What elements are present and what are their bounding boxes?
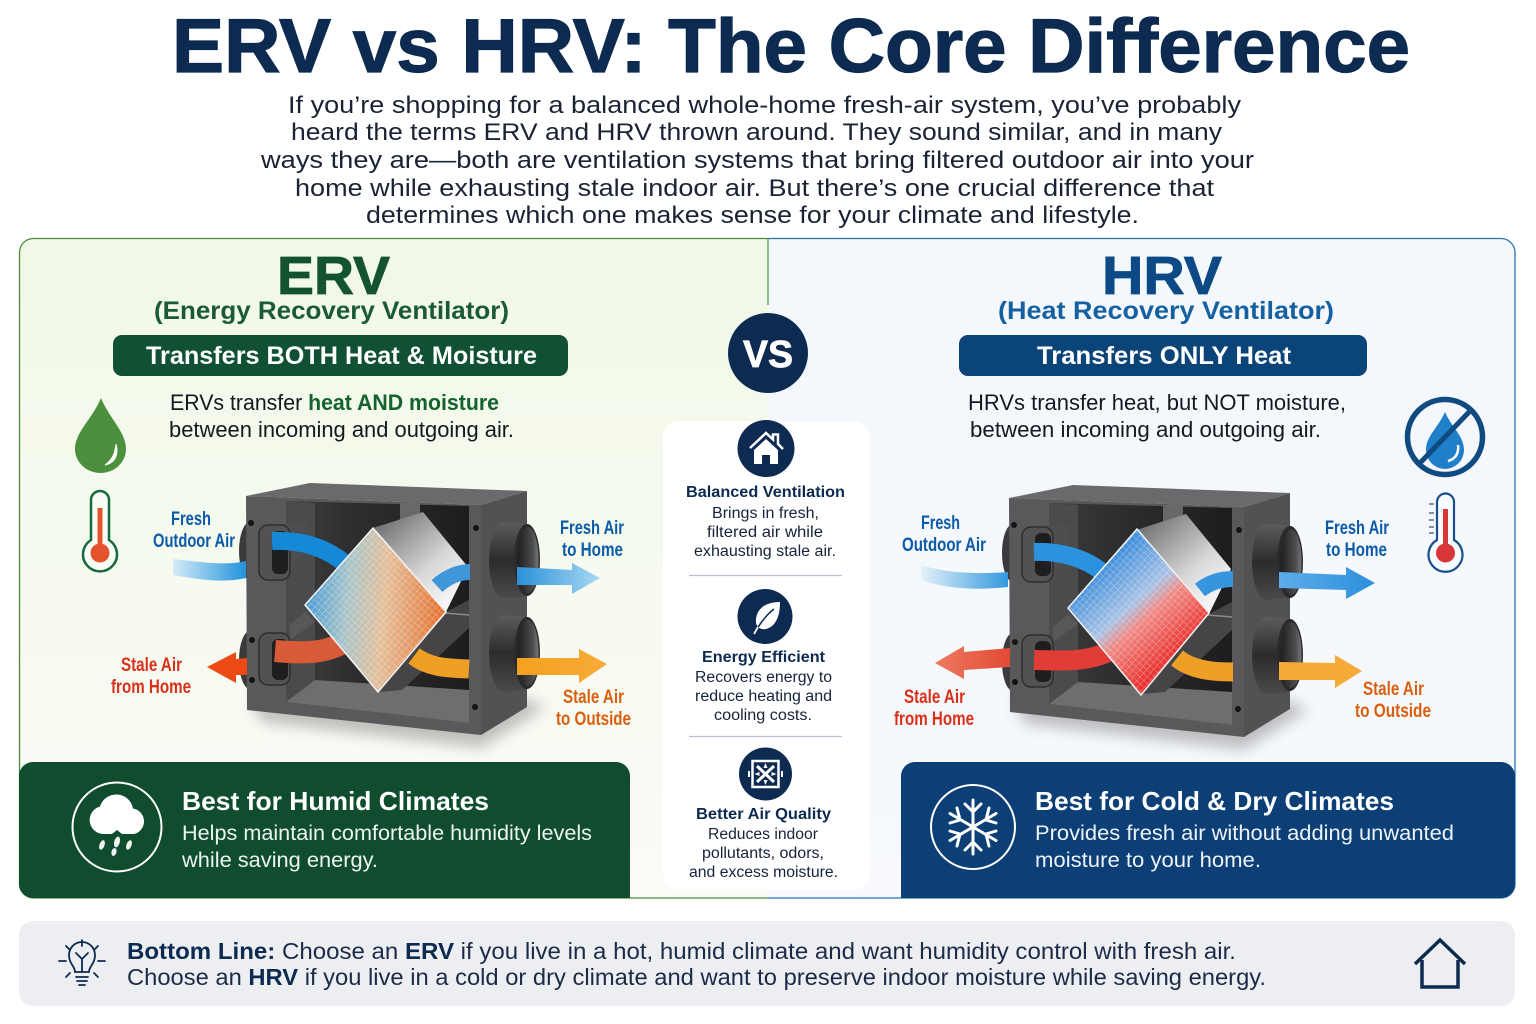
bottom line bar: Choose an HRV if you live in a cold or dry climate and want to preserve indoor moisture while saving energy. — [127, 964, 1266, 990]
intro paragraph: determines which one makes sense for your climate and lifestyle. — [366, 202, 1139, 229]
intro paragraph: home while exhausting stale indoor air. But there’s one crucial difference that — [295, 175, 1214, 202]
labels: ERV airflow: from Home — [111, 677, 191, 698]
benefit: balanced ventilation: exhausting stale air. — [694, 543, 836, 560]
icon: light bulb — [59, 940, 105, 985]
VS badge: VS — [743, 334, 793, 376]
labels: ERV airflow — [111, 509, 631, 730]
benefit: energy efficient — [695, 649, 832, 724]
airflow: fresh outdoor air in — [173, 559, 246, 581]
benefit: balanced ventilation: filtered air while — [707, 524, 823, 541]
diagram: HRV ventilator unit — [921, 485, 1375, 750]
benefit: better air quality: Better Air Quality — [696, 806, 831, 823]
arrow: stale air from home — [935, 646, 1010, 679]
HRV description: HRVs transfer heat, but NOT moisture, — [968, 390, 1346, 415]
labels: HRV airflow: Fresh Air — [1325, 518, 1389, 539]
benefit: balanced ventilation: Brings in fresh, — [712, 505, 819, 522]
panel: best for humid climates — [19, 762, 630, 898]
intro paragraph: heard the terms ERV and HRV thrown around. They sound similar, and in many — [291, 119, 1222, 146]
arrow: stale air to outside — [1279, 655, 1362, 688]
benefit: better air quality: pollutants, odors, — [702, 845, 824, 862]
arrow: stale air from home — [207, 652, 247, 683]
labels: ERV airflow: Stale Air — [121, 655, 182, 676]
labels: ERV airflow: to Home — [562, 540, 623, 561]
labels: HRV airflow: Fresh — [921, 513, 960, 534]
icon: house — [738, 420, 794, 477]
bottom line bar: Bottom Line: Choose an ERV if you live in a hot, humid climate and want humidity control with fresh air. — [127, 938, 1236, 964]
benefit: better air quality — [689, 806, 838, 881]
benefit: energy efficient: Energy Efficient — [702, 649, 825, 666]
panel: best for cold and dry climates: moisture to your home. — [1035, 849, 1261, 872]
heading: ERV: ERV — [277, 246, 390, 306]
benefit: energy efficient: Recovers energy to — [695, 669, 832, 686]
HRV description — [968, 390, 1346, 442]
badge: transfers both heat and moisture: Transfers BOTH Heat & Moisture — [146, 342, 537, 370]
arrow: fresh air to home — [517, 563, 600, 594]
benefit: energy efficient: cooling costs. — [714, 707, 812, 724]
icon: rain cloud — [72, 782, 162, 872]
benefit: balanced ventilation: Balanced Ventilation — [686, 484, 845, 501]
labels: HRV airflow: Outdoor Air — [902, 535, 986, 556]
heat exchanger core — [305, 512, 469, 692]
airflow: fresh outdoor air in — [921, 565, 1008, 589]
heading: ERV: (Energy Recovery Ventilator) — [154, 297, 509, 325]
ERV description: between incoming and outgoing air. — [169, 417, 514, 442]
intro paragraph: If you’re shopping for a balanced whole-home fresh-air system, you’ve probably — [288, 92, 1241, 119]
labels: HRV airflow: to Home — [1326, 540, 1387, 561]
labels: ERV airflow: Fresh Air — [560, 518, 624, 539]
VS badge — [728, 313, 808, 393]
icon: snowflake — [931, 785, 1015, 869]
icon: leaf — [738, 589, 792, 644]
icon: blue thermometer — [1429, 494, 1462, 572]
labels: ERV airflow: Fresh — [171, 509, 211, 530]
panel: best for humid climates: Helps maintain comfortable humidity levels — [182, 822, 592, 845]
intro paragraph — [260, 92, 1254, 229]
badge: transfers only heat: Transfers ONLY Heat — [1037, 342, 1292, 370]
labels: HRV airflow: from Home — [894, 709, 974, 730]
title: ERV vs HRV: The Core Difference — [172, 4, 1410, 89]
labels: ERV airflow: to Outside — [556, 709, 631, 730]
panel: best for cold and dry climates: Provides fresh air without adding unwanted — [1035, 822, 1454, 845]
icon: green thermometer — [83, 491, 117, 571]
heading: ERV — [154, 246, 509, 325]
benefit: balanced ventilation — [686, 484, 845, 560]
diagram: ERV ventilator unit — [173, 483, 607, 748]
icon: air filter — [739, 748, 792, 800]
benefit: better air quality: Reduces indoor — [708, 826, 818, 843]
labels: HRV airflow: to Outside — [1355, 701, 1431, 722]
arrow: stale air to outside — [517, 649, 607, 683]
ERV description: ERVs transfer heat AND moisture — [170, 390, 499, 415]
heading: HRV: (Heat Recovery Ventilator) — [998, 297, 1334, 325]
benefit: better air quality: and excess moisture. — [689, 864, 838, 881]
HRV description: between incoming and outgoing air. — [970, 417, 1321, 442]
panel: best for cold and dry climates — [901, 762, 1515, 898]
panel: best for humid climates: while saving energy. — [181, 849, 378, 872]
labels: ERV airflow: Stale Air — [563, 687, 624, 708]
panel: HRV background — [768, 238, 1515, 898]
badge: transfers only heat — [959, 335, 1367, 376]
icon: green water drop — [75, 398, 126, 473]
labels: HRV airflow — [894, 513, 1431, 730]
heat exchanger core — [1068, 514, 1232, 695]
panel: ERV background — [19, 238, 768, 898]
labels: HRV airflow: Stale Air — [904, 687, 965, 708]
center column: shared benefits card — [663, 420, 870, 890]
panel: best for cold and dry climates: Best for Cold & Dry Climates — [1035, 786, 1394, 816]
badge: transfers both heat and moisture — [113, 335, 568, 376]
labels: ERV airflow: Outdoor Air — [153, 531, 235, 552]
panel: best for humid climates: Best for Humid Climates — [182, 786, 489, 816]
icon: house outline — [1415, 940, 1465, 987]
heading: HRV: HRV — [1102, 246, 1222, 306]
icon: no moisture — [1408, 400, 1482, 474]
ERV description — [169, 390, 514, 442]
heading: HRV — [998, 246, 1334, 325]
labels: HRV airflow: Stale Air — [1363, 679, 1424, 700]
arrow: fresh air to home — [1279, 567, 1375, 599]
intro paragraph: ways they are—both are ventilation systems that bring filtered outdoor air into your — [260, 147, 1254, 174]
benefit: energy efficient: reduce heating and — [695, 688, 832, 705]
bottom line bar — [19, 921, 1515, 1006]
